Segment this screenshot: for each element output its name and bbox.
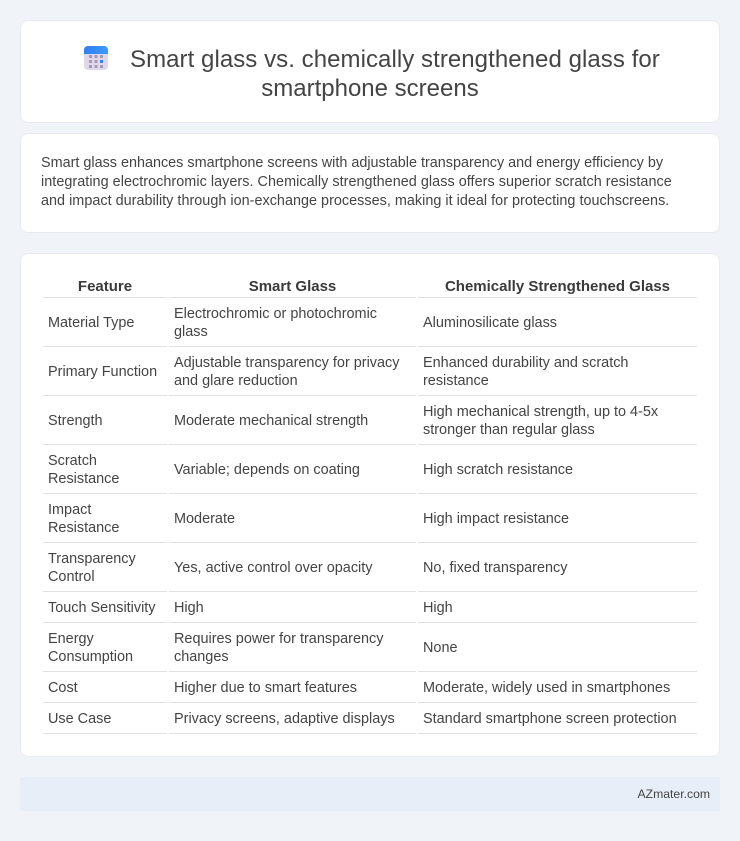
- row: Material Type: [43, 306, 697, 347]
- row: Scratch Resistance: Scratch: [48, 453, 97, 469]
- row: Energy Consumption: None: [423, 640, 458, 656]
- row: Primary Function: Enhanced durability and scratch: [423, 355, 628, 371]
- row: Energy Consumption: changes: [174, 649, 229, 665]
- row: Transparency Control: Yes, active control over opacity: [174, 560, 372, 576]
- row: Primary Function: [43, 355, 697, 396]
- intro text: and impact durability through ion-exchange processes, making it ideal for protecting touchscreens.: [41, 193, 669, 209]
- footer text: AZmater.com: [638, 787, 710, 801]
- row: Use Case: Use Case: [48, 711, 111, 727]
- row: Touch Sensitivity: Touch Sensitivity: [48, 600, 156, 616]
- row: Strength: stronger than regular glass: [423, 422, 595, 438]
- row: Cost: Moderate, widely used in smartphones: [423, 680, 670, 696]
- row: Touch Sensitivity: [43, 600, 697, 623]
- row: Cost: [43, 680, 697, 703]
- row: Impact Resistance: Resistance: [48, 520, 119, 536]
- row: Primary Function: Adjustable transparency for privacy: [174, 355, 400, 371]
- row: Use Case: [43, 711, 697, 734]
- row: Strength: Moderate mechanical strength: [174, 413, 368, 429]
- row: Energy Consumption: [43, 631, 697, 672]
- intro text: integrating electrochromic layers. Chemically strengthened glass offers superior scratch resistance: [41, 174, 672, 190]
- row: Energy Consumption: Requires power for transparency: [174, 631, 383, 647]
- row: Scratch Resistance: [43, 453, 697, 494]
- row: Scratch Resistance: High scratch resistance: [423, 462, 573, 478]
- table card: [20, 253, 720, 757]
- row: Impact Resistance: High impact resistance: [423, 511, 569, 527]
- row: Scratch Resistance: Variable; depends on coating: [174, 462, 360, 478]
- row: Strength: [43, 404, 697, 445]
- row: Transparency Control: [43, 551, 697, 592]
- row: Strength: Strength: [48, 413, 103, 429]
- intro card: [20, 133, 720, 233]
- row: Strength: High mechanical strength, up to 4-5x: [423, 404, 658, 420]
- intro text: Smart glass enhances smartphone screens with adjustable transparency and energy efficiency by: [41, 155, 663, 171]
- row: Use Case: Standard smartphone screen protection: [423, 711, 677, 727]
- header card: [20, 20, 720, 123]
- row: Material Type: Material Type: [48, 315, 134, 331]
- icon: calendar: [84, 46, 108, 70]
- row: Energy Consumption: Consumption: [48, 649, 133, 665]
- row: Material Type: glass: [174, 324, 208, 340]
- header: Chemically Strengthened Glass: Chemically Strengthened Glass: [445, 278, 670, 295]
- row: Impact Resistance: Impact: [48, 502, 91, 518]
- title: Smart glass vs. chemically strengthened glass for: [130, 46, 660, 73]
- row: Primary Function: resistance: [423, 373, 489, 389]
- title: smartphone screens: [261, 75, 479, 102]
- row: Material Type: Electrochromic or photochromic: [174, 306, 377, 322]
- row: Primary Function: and glare reduction: [174, 373, 298, 389]
- row: Touch Sensitivity: High: [174, 600, 204, 616]
- footer bar: [20, 777, 720, 811]
- intro text: [41, 155, 672, 209]
- row: Energy Consumption: Energy: [48, 631, 94, 647]
- header: Smart Glass: Smart Glass: [249, 278, 336, 295]
- row: Cost: Cost: [48, 680, 78, 696]
- row: Impact Resistance: [43, 502, 697, 543]
- row: Touch Sensitivity: High: [423, 600, 453, 616]
- row: Transparency Control: Transparency: [48, 551, 136, 567]
- row: Cost: Higher due to smart features: [174, 680, 357, 696]
- row: Primary Function: Primary Function: [48, 364, 157, 380]
- row: Transparency Control: Control: [48, 569, 95, 585]
- row: Material Type: Aluminosilicate glass: [423, 315, 557, 331]
- row: Scratch Resistance: Resistance: [48, 471, 119, 487]
- table: [43, 278, 697, 734]
- header: Feature: Feature: [78, 278, 132, 295]
- row: Transparency Control: No, fixed transparency: [423, 560, 567, 576]
- title: [130, 46, 660, 102]
- row: Impact Resistance: Moderate: [174, 511, 235, 527]
- row: Use Case: Privacy screens, adaptive displays: [174, 711, 395, 727]
